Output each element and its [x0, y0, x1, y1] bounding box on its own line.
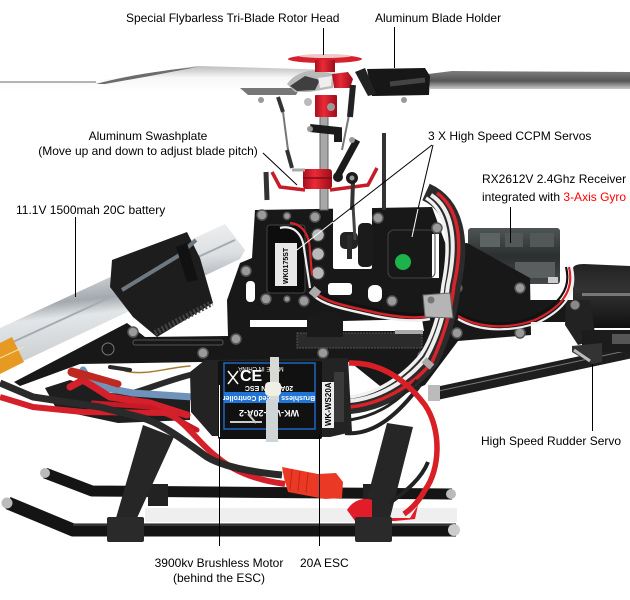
label: rudder servo: High Speed Rudder Servo	[481, 434, 621, 448]
red lower block	[315, 95, 337, 117]
servo lead	[280, 223, 312, 288]
ESC speed controller: WK-WS-20A-2	[239, 408, 299, 418]
ESC speed controller: 20A5-14N ESC	[245, 384, 293, 391]
label: battery: 11.1V 1500mah 20C battery	[16, 203, 165, 217]
callout lines	[76, 27, 592, 546]
label: ESC: 20A ESC	[300, 556, 349, 570]
servo lead across frame	[314, 290, 432, 320]
label: receiver: 3-Axis Gyro	[563, 190, 626, 204]
label: servos: 3 X High Speed CCPM Servos	[428, 129, 591, 143]
servo in window	[340, 205, 373, 267]
servo wire to receiver	[458, 267, 573, 329]
servo lead clip	[309, 286, 321, 299]
red battery connector	[282, 467, 343, 499]
right rotor blade	[428, 71, 630, 89]
label: blade holder: Aluminum Blade Holder	[375, 11, 501, 25]
front servo with label	[267, 225, 305, 293]
mast	[320, 115, 328, 210]
main wire bundle	[350, 192, 459, 407]
white cable tie	[265, 357, 281, 442]
rotor head	[278, 54, 384, 210]
pitch links	[278, 97, 283, 112]
left wiring plate	[45, 380, 190, 423]
ESC speed controller: CE	[240, 368, 263, 385]
tail servo block	[565, 264, 630, 364]
battery connector wires	[0, 383, 285, 484]
label: brushless motor: 3900kv Brushless Motor	[155, 556, 283, 570]
ESC speed controller: Brushless Speed Controller	[223, 394, 315, 401]
green sticker	[395, 254, 411, 270]
rudder servo	[572, 343, 602, 364]
receiver with gyro	[468, 228, 560, 284]
ESC speed controller	[190, 358, 352, 439]
cable clips	[423, 293, 453, 367]
skid clamps	[107, 517, 144, 542]
ESC power wire	[349, 363, 437, 514]
label: receiver: integrated with	[482, 190, 563, 204]
frame cut-outs	[246, 204, 439, 331]
rear guide post	[382, 133, 386, 210]
red cap	[288, 55, 362, 63]
front landing skid	[2, 498, 460, 542]
tail boom and support rod	[428, 300, 630, 401]
main gear block	[307, 311, 343, 337]
red hub	[332, 72, 353, 88]
battery pack	[0, 224, 245, 374]
rotor hub chrome	[287, 70, 333, 92]
landing skid reflection	[145, 508, 457, 522]
scissor link	[310, 128, 338, 142]
ESC black wires	[345, 380, 428, 503]
drive gear	[297, 333, 422, 348]
rear landing skid	[40, 468, 456, 506]
right landing strut	[362, 423, 413, 518]
label: swashplate: Aluminum Swashplate	[89, 129, 208, 143]
aluminum blade holder	[258, 68, 430, 103]
main black frame	[14, 204, 531, 398]
aluminum swashplate	[266, 168, 377, 210]
red cable mount	[347, 499, 418, 521]
battery velcro strap	[110, 232, 213, 337]
label: brushless motor: (behind the ESC)	[173, 571, 265, 585]
front servo with label: WK0175ST	[283, 247, 290, 284]
label: rotor head: Special Flybarless Tri-Blade Rotor Head	[126, 11, 339, 25]
ESC barcode sticker	[322, 382, 334, 428]
left rotor blade	[0, 66, 335, 95]
frame screws	[128, 210, 525, 361]
label: receiver: RX2612V 2.4Ghz Receiver	[482, 172, 626, 186]
label: swashplate: (Move up and down to adjust blade pitch)	[38, 144, 258, 158]
landing strut left	[116, 425, 174, 518]
motor wires	[70, 366, 197, 430]
ESC speed controller: WK-WS20A	[324, 382, 333, 426]
servo mounting holes	[312, 228, 324, 280]
ESC speed controller: MADE IN CHINA	[238, 365, 284, 371]
